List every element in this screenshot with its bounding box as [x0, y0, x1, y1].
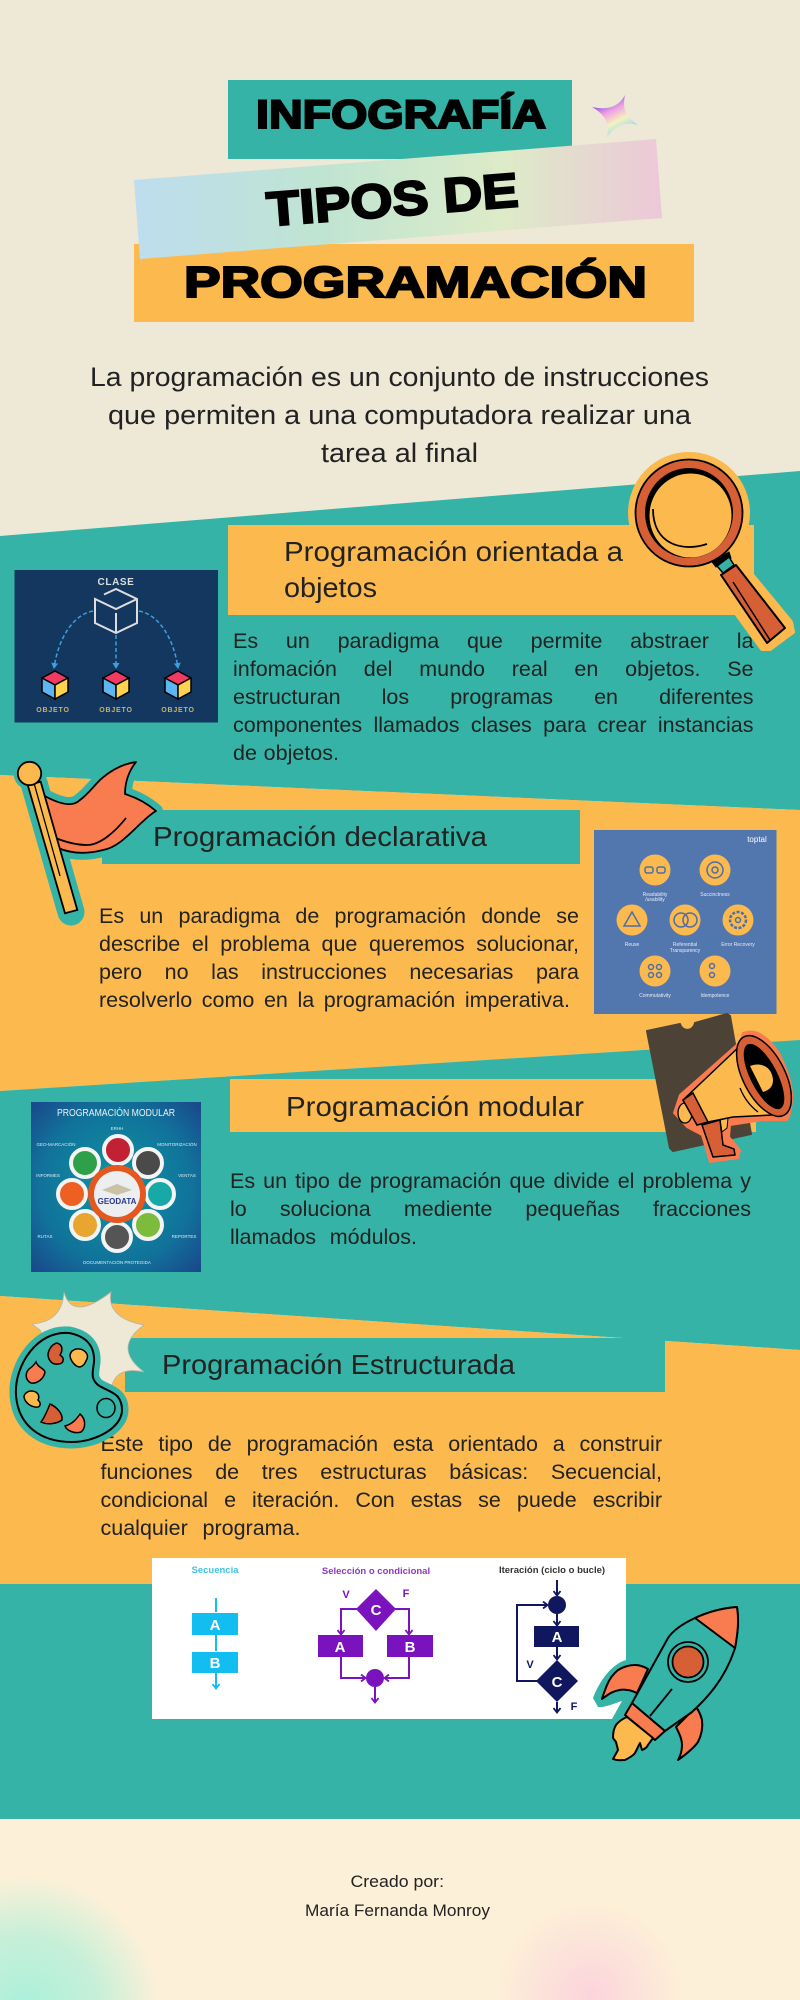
- title line 2: TIPOS DE: [265, 164, 520, 237]
- title box: orange: [134, 244, 694, 322]
- heading: programación declarativa: [102, 810, 580, 864]
- footer credits: [305, 1872, 490, 1920]
- sparkle icon: [592, 95, 638, 137]
- flowchart: selección o condicional: Selección o condicional: [322, 1566, 430, 1577]
- title tape: gradient: [134, 139, 662, 259]
- image: clase y objetos: [14, 570, 218, 722]
- title block: [134, 80, 694, 322]
- image: principios funcionales: Reuse: [625, 942, 639, 948]
- background: teal band 3: [0, 1040, 800, 1350]
- title line 1: INFOGRAFÍA: [256, 92, 546, 137]
- body text: estructurada: Este tipo de programación esta orientado a construir: [100, 1432, 662, 1456]
- intro paragraph: que permiten a una computadora realizar una: [108, 400, 691, 430]
- body text: declarativa: resolverlo como en la programación imperativa.: [99, 988, 570, 1012]
- image: principios funcionales: Error Recovery: [721, 942, 755, 948]
- flowchart: iteración: [499, 1565, 605, 1713]
- body text: orientada a objetos: Es un paradigma que permite abstraer la: [233, 629, 754, 653]
- flowchart: selección o condicional: B: [405, 1639, 416, 1656]
- image: programación modular: [31, 1102, 201, 1272]
- image: programación modular: MONITORIZACIÓN: [157, 1141, 197, 1147]
- board behind megaphone: [647, 1014, 751, 1151]
- icon: megaphone: [647, 1014, 800, 1162]
- image: diagramas de flujo: [152, 1558, 626, 1719]
- flowchart: iteración: V: [526, 1659, 534, 1671]
- background: orange band 4: [0, 1296, 800, 1584]
- body text: modular: [230, 1169, 751, 1249]
- flowchart: iteración: A: [552, 1629, 563, 1646]
- flowchart: secuencia: A: [210, 1617, 221, 1634]
- intro paragraph: tarea al final: [321, 438, 478, 468]
- icon: paint palette: [16, 1333, 122, 1442]
- image: principios funcionales: toptal: [747, 835, 767, 844]
- body text: orientada a objetos: infomación del mundo real en objetos. Se: [233, 657, 754, 681]
- body text: modular: Es un tipo de programación que divide el problema y: [230, 1169, 751, 1193]
- heading: programación estructurada: Programación Estructurada: [162, 1349, 515, 1380]
- icon: rocket: [593, 1607, 738, 1760]
- heading: programación orientada a objetos: [228, 525, 754, 615]
- image: programación modular: REPORTES: [172, 1234, 196, 1239]
- flowchart: iteración: Iteración (ciclo o bucle): [499, 1565, 605, 1576]
- title line 3: PROGRAMACIÓN: [184, 257, 647, 307]
- body text: orientada a objetos: de objetos.: [233, 741, 339, 765]
- flowchart: selección o condicional: V: [342, 1589, 350, 1601]
- icon: magnifying glass: [628, 452, 793, 649]
- body text: modular: llamados módulos.: [230, 1225, 417, 1249]
- body text: estructurada: [100, 1432, 662, 1540]
- flowchart: secuencia: [192, 1565, 239, 1688]
- image: clase y objetos: CLASE: [98, 577, 134, 588]
- flowchart: selección o condicional: [318, 1566, 433, 1702]
- image: principios funcionales: Succinctness: [700, 892, 730, 898]
- icon: flag: [14, 758, 156, 913]
- heading: programación orientada a objetos: Programación orientada a: [284, 536, 623, 567]
- flowchart: selección o condicional: A: [335, 1639, 346, 1656]
- background: teal band 5: [0, 1584, 800, 1819]
- image: programación modular: GEO-MARCACIÓN: [36, 1141, 76, 1147]
- image: programación modular: VENTAS: [178, 1173, 196, 1178]
- image: clase y objetos: OBJETO: [161, 707, 195, 714]
- body text: orientada a objetos: componentes llamados clases para crear instancias: [233, 713, 754, 737]
- image: programación modular: INFORMES: [36, 1173, 60, 1178]
- body text: orientada a objetos: [233, 629, 754, 765]
- footer credits: Creado por:: [350, 1872, 444, 1891]
- icon: paint burst: [32, 1292, 144, 1385]
- heading: programación modular: [230, 1079, 756, 1132]
- footer credits: María Fernanda Monroy: [305, 1901, 490, 1920]
- body text: orientada a objetos: estructuran los programas en diferentes: [233, 685, 754, 709]
- flowchart: iteración: C: [552, 1674, 563, 1691]
- body text: estructurada: cualquier programa.: [100, 1516, 300, 1540]
- heading: programación orientada a objetos: objetos: [284, 572, 377, 603]
- image: principios funcionales: /usability: [645, 897, 665, 903]
- intro paragraph: La programación es un conjunto de instrucciones: [90, 362, 709, 392]
- background: orange band 2: [0, 775, 800, 1091]
- image: principios funcionales: Readability: [643, 892, 668, 898]
- image: principios funcionales: Referential: [673, 942, 697, 948]
- heading: programación declarativa: Programación declarativa: [153, 821, 487, 852]
- image: clase y objetos: OBJETO: [36, 707, 70, 714]
- body text: estructurada: condicional e iteración. Con estas se puede escribir: [100, 1488, 662, 1512]
- flowchart: secuencia: Secuencia: [192, 1565, 239, 1576]
- image: programación modular: DOCUMENTACIÓN PROTEGIDA: [83, 1259, 151, 1265]
- image: programación modular: GEODATA: [98, 1197, 137, 1206]
- flowchart: iteración: F: [571, 1701, 578, 1713]
- body text: declarativa: describe el problema que queremos solucionar,: [99, 932, 579, 956]
- body text: declarativa: [99, 904, 579, 1012]
- image: principios funcionales: Transparency: [670, 948, 701, 954]
- image: principios funcionales: Idempotence: [701, 993, 730, 999]
- image: programación modular: PROGRAMACIÓN MODULAR: [57, 1106, 175, 1119]
- body text: declarativa: Es un paradigma de programación donde se: [99, 904, 579, 928]
- heading: programación estructurada: [125, 1338, 665, 1392]
- image: programación modular: RUTAS: [38, 1234, 52, 1239]
- intro paragraph: [90, 362, 709, 468]
- image: principios funcionales: [594, 830, 776, 1014]
- title box: teal: [228, 80, 572, 159]
- image: clase y objetos: OBJETO: [99, 707, 133, 714]
- heading: programación modular: Programación modular: [286, 1091, 584, 1122]
- flowchart: secuencia: B: [210, 1655, 221, 1672]
- body text: declarativa: pero no las instrucciones necesarias para: [99, 960, 579, 984]
- body text: estructurada: funciones de tres estructuras básicas: Secuencial,: [100, 1460, 662, 1484]
- flowchart: selección o condicional: F: [403, 1588, 410, 1600]
- flowchart: selección o condicional: C: [371, 1602, 382, 1619]
- background: teal band 1: [0, 471, 800, 810]
- footer background: [0, 1819, 800, 2000]
- image: principios funcionales: Commutativity: [639, 993, 671, 999]
- body text: modular: lo soluciona mediente pequeñas fracciones: [230, 1197, 751, 1221]
- image: programación modular: ERHH: [111, 1126, 123, 1131]
